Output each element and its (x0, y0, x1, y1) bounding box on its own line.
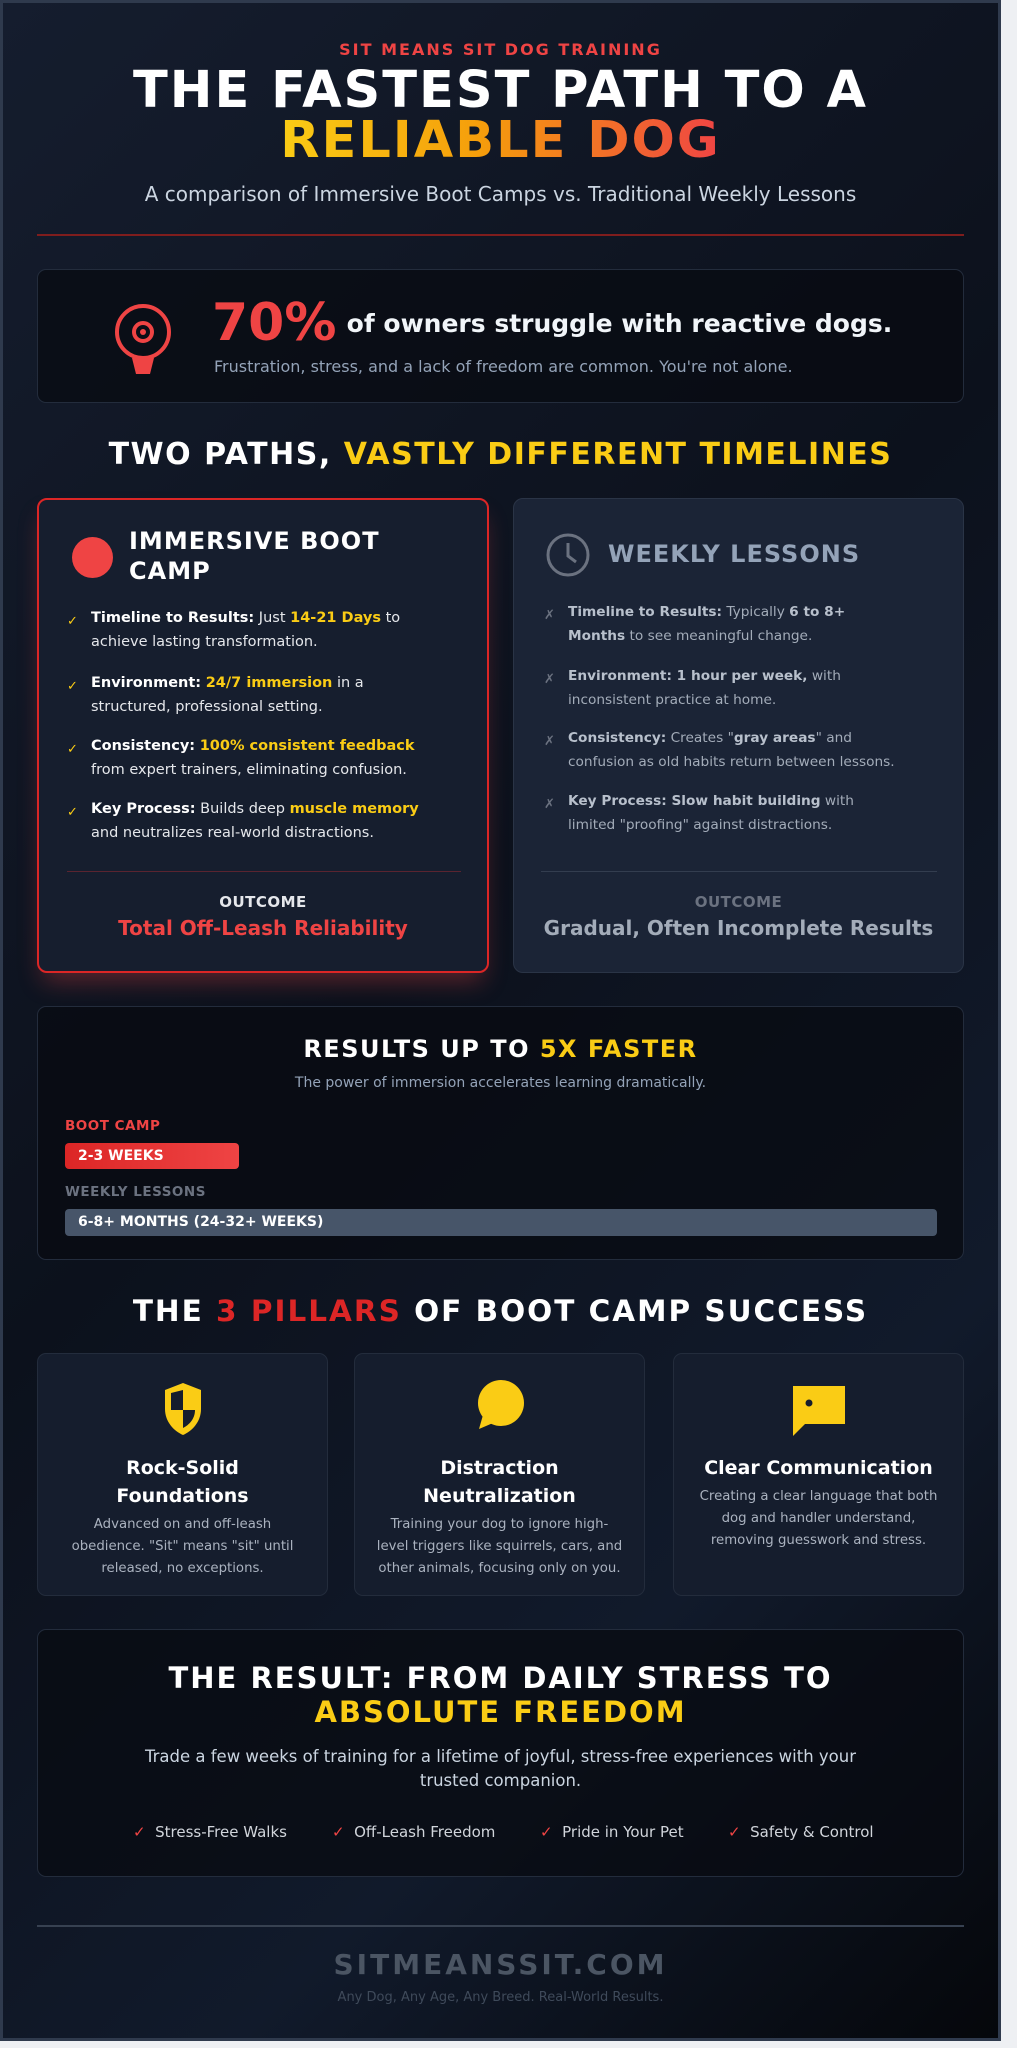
list: structured, professional setting. (91, 699, 323, 715)
list: Timeline to Results: Just 14-21 Days to (91, 610, 400, 626)
list: inconsistent practice at home. (568, 692, 776, 708)
pillar: communication: Clear Communication (704, 1457, 933, 1479)
chart title: RESULTS UP TO 5X FASTER (303, 1035, 698, 1063)
bar: boot camp: 2-3 WEEKS (78, 1148, 164, 1164)
list: Months to see meaningful change. (568, 628, 812, 644)
icon: red dot (72, 537, 113, 578)
bar: weekly lessons: WEEKLY LESSONS (65, 1184, 206, 1200)
icon: target (115, 304, 171, 374)
panel: weekly lessons: ✗ (544, 734, 555, 749)
pillar: communication (673, 1353, 964, 1596)
pillar: foundations: Advanced on and off-leash (94, 1517, 271, 1532)
card title (129, 527, 380, 585)
panel: boot camp: ✓ (67, 614, 78, 629)
pillar: foundations: Foundations (116, 1485, 249, 1507)
panel: results chart: The power of immersion accelerates learning dramatically. (295, 1075, 706, 1091)
result heading: THE RESULT: FROM DAILY STRESS TO (168, 1661, 833, 1695)
pillar: communication: Creating a clear language that both (700, 1489, 937, 1504)
section heading: pillars: THE 3 PILLARS OF BOOT CAMP SUCCESS (133, 1294, 868, 1328)
pillar: foundations: Rock-Solid (126, 1457, 239, 1479)
list: Consistency: 100% consistent feedback (91, 738, 414, 754)
panel: weekly lessons: ✗ (544, 608, 555, 623)
title (133, 61, 868, 170)
list: Timeline to Results: Typically 6 to 8+ (568, 604, 845, 620)
list: achieve lasting transformation. (91, 634, 318, 650)
subtitle: A comparison of Immersive Boot Camps vs. Traditional Weekly Lessons (145, 182, 856, 206)
benefits list (133, 1823, 874, 1841)
list: confusion as old habits return between lessons. (568, 754, 895, 770)
pillar: foundations: released, no exceptions. (101, 1561, 264, 1576)
benefits list: ✓ Stress-Free Walks (133, 1823, 287, 1841)
title: RELIABLE DOG (280, 111, 721, 170)
pillar: foundations: obedience. "Sit" means "sit" until (72, 1539, 293, 1554)
benefits list: ✓ Pride in Your Pet (540, 1823, 684, 1841)
result text: Trade a few weeks of training for a lifetime of joyful, stress-free experiences with your trusted companion. (145, 1747, 856, 1790)
outcome: OUTCOME (219, 893, 307, 911)
card title: IMMERSIVE BOOT (129, 527, 380, 555)
pillar: distraction: Neutralization (423, 1485, 576, 1507)
panel: results chart (37, 1006, 964, 1260)
bar: boot camp: BOOT CAMP (65, 1118, 160, 1134)
benefits list: ✓ Off-Leash Freedom (332, 1823, 495, 1841)
outcome: Gradual, Often Incomplete Results (544, 916, 933, 940)
card title: WEEKLY LESSONS (608, 540, 860, 568)
pillar: communication: dog and handler understand, (722, 1511, 915, 1526)
pillar: communication: removing guesswork and stress. (711, 1533, 926, 1548)
title: THE FASTEST PATH TO A (133, 61, 868, 120)
pillar: foundations (37, 1353, 328, 1596)
list: and neutralizes real-world distractions. (91, 825, 374, 841)
outcome: Total Off-Leash Reliability (118, 916, 408, 940)
icon: shield (165, 1383, 201, 1435)
panel: the result (37, 1629, 964, 1877)
panel: boot camp (37, 498, 489, 973)
result heading (168, 1661, 833, 1729)
list: Key Process: Slow habit building with (568, 793, 854, 809)
list: Environment: 24/7 immersion in a (91, 675, 364, 691)
pillar: distraction: Distraction (440, 1457, 559, 1479)
result heading: ABSOLUTE FREEDOM (314, 1695, 687, 1729)
bar: weekly lessons: 6-8+ MONTHS (24-32+ WEEKS) (78, 1214, 323, 1230)
pillar: distraction: Training your dog to ignore high- (391, 1517, 608, 1532)
outcome (118, 893, 408, 940)
icon: message (793, 1386, 845, 1436)
list (67, 610, 419, 841)
icon: speech bubble (478, 1380, 524, 1429)
list: Consistency: Creates "gray areas" and (568, 730, 852, 746)
outcome (544, 893, 933, 940)
outcome: OUTCOME (695, 893, 782, 911)
panel: boot camp: ✓ (67, 742, 78, 757)
panel: boot camp: ✓ (67, 679, 78, 694)
panel: weekly lessons (513, 498, 964, 973)
bar: boot camp (65, 1118, 239, 1169)
bar: weekly lessons (65, 1184, 937, 1236)
pillar: distraction: other animals, focusing only on you. (378, 1561, 621, 1576)
stat panel: Frustration, stress, and a lack of freedom are common. You're not alone. (214, 357, 793, 376)
icon: clock (546, 534, 590, 576)
panel: boot camp: ✓ (67, 805, 78, 820)
panel: weekly lessons: ✗ (544, 797, 555, 812)
card title: CAMP (129, 557, 211, 585)
list (544, 604, 895, 833)
text: Any Dog, Any Age, Any Breed. Real-World Results. (338, 1990, 663, 2005)
pillar: distraction (354, 1353, 645, 1596)
panel: weekly lessons: ✗ (544, 672, 555, 687)
pillar: distraction: level triggers like squirrels, cars, and (377, 1539, 622, 1554)
list: Key Process: Builds deep muscle memory (91, 801, 419, 817)
section heading: two paths: TWO PATHS, VASTLY DIFFERENT TIMELINES (109, 437, 892, 472)
list: Environment: 1 hour per week, with (568, 668, 841, 684)
list: limited "proofing" against distractions. (568, 817, 832, 833)
stat panel (37, 269, 964, 403)
brand kicker: SIT MEANS SIT DOG TRAINING (339, 40, 662, 59)
footer: SITMEANSSIT.COM (334, 1948, 667, 1981)
list: from expert trainers, eliminating confusion. (91, 762, 407, 778)
benefits list: ✓ Safety & Control (728, 1823, 874, 1841)
stat text: 70% of owners struggle with reactive dogs. (212, 293, 892, 353)
